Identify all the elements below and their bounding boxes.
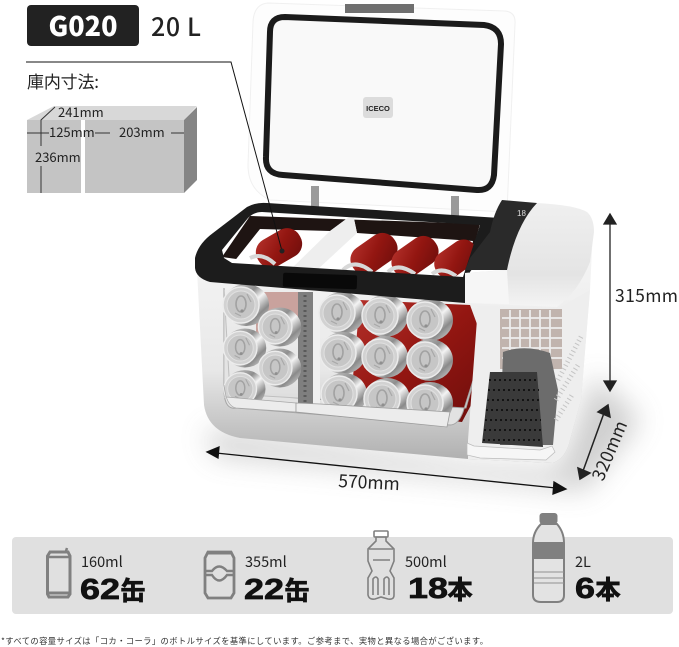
width dimension arrow [207,447,566,494]
leader dot [280,248,284,254]
internal dimensions heading: 庫内寸法: [27,68,99,93]
2L text: 本 [595,570,621,607]
leader line from badge to can [26,62,282,251]
500ml text: 本 [447,570,473,607]
rim latch [283,273,357,289]
basket front tray right [296,403,450,427]
500ml text: 18 [408,573,448,605]
internal dimensions box diagram [27,102,197,193]
inner basket [224,288,482,425]
upper red cans [250,223,483,284]
open lid: ICECO [366,104,390,113]
model badge: G020 [48,5,118,44]
internal dimensions box diagram: 203mm [119,122,165,141]
compressor compartment [467,290,590,463]
aluminum cans left [223,284,301,408]
control module [465,200,594,307]
aluminum cans right [319,292,453,424]
160ml text [80,551,146,608]
black rim [195,203,500,303]
interior walls and white compartment [222,214,480,272]
basket front lip left [224,385,296,412]
divider [298,292,320,412]
cooler illustration [195,3,594,463]
icon: 2L bottle [533,513,564,602]
model badge [27,5,139,46]
depth dimension arrow [578,405,610,479]
internal dimensions box diagram: 236mm [35,147,81,166]
height label: 315mm [615,283,678,308]
internal dimensions box diagram: 125mm [49,122,95,141]
icon: 355ml can [205,552,234,598]
transparent cooler body [197,230,593,463]
icon: 500ml bottle [368,531,394,599]
160ml text: 62 [80,574,120,606]
height dimension arrow [604,214,616,391]
capacity panel [12,537,673,614]
ground shadow [205,375,640,490]
355ml text: 缶 [284,571,310,608]
capacity label: 20 L [151,8,201,44]
500ml text: 500ml [405,551,447,572]
160ml text: 缶 [120,571,146,608]
2L text [575,551,621,607]
355ml text: 355ml [245,551,287,572]
internal dimensions box diagram: 241mm [58,102,104,121]
355ml text: 22 [244,574,284,606]
500ml text [405,551,473,607]
icon: 160ml can [48,548,70,597]
depth label: 320mm [586,417,633,484]
open lid [248,3,515,218]
355ml text [244,551,310,608]
160ml text: 160ml [81,551,123,572]
footnote: *すべての容量サイズは「コカ・コーラ」のボトルサイズを基準にしています。ご参考まで、実物と異なる場合がございます。 [1,635,488,647]
control module: 18 [517,209,526,218]
width label: 570mm [338,468,400,496]
2L text: 6 [575,573,595,605]
2L text: 2L [575,551,591,572]
red can bodies behind [256,292,481,422]
